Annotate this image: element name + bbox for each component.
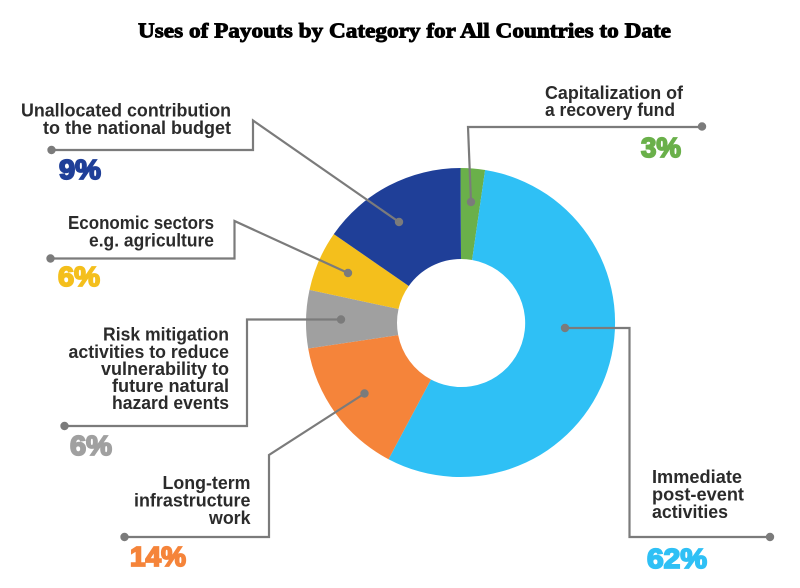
value: 9% [59,154,101,185]
label: post-event [652,484,744,504]
label [21,100,231,138]
leader line [561,324,774,541]
callout: risk mitigation [60,315,345,461]
leader line [47,120,403,226]
leader line [60,315,345,430]
segment: long-term infrastructure work 14% [308,335,431,459]
value: 3% [641,132,681,163]
label: activities to reduce [68,341,229,362]
segment: capitalization of a recovery fund 3% [460,168,485,260]
label: Unallocated contribution [21,100,231,120]
label: infrastructure [134,490,250,510]
label [68,212,214,250]
callout: capitalization of a recovery fund [467,82,706,206]
callout: long-term infrastructure work [120,389,369,572]
leader line [46,221,352,277]
title: Uses of Payouts by Category for All Countries to Date [138,18,671,42]
segment: immediate post-event activities 62% [388,170,615,477]
label: Long-term [162,472,250,493]
callout: unallocated contribution [21,100,403,226]
callout: immediate post-event activities [561,324,774,574]
label: work [208,507,251,528]
label: e.g. agriculture [89,230,214,250]
label: hazard events [112,392,229,413]
value: 62% [647,543,707,574]
label [68,324,229,413]
label [545,82,684,120]
segment: unallocated contribution 9% [334,168,461,286]
label: Immediate [652,466,742,487]
leader line [467,122,706,206]
value: 6% [70,430,112,461]
label: Capitalization of [545,82,684,103]
donut chart [306,168,615,477]
value: 6% [58,261,100,292]
label: activities [652,501,728,522]
label: a recovery fund [545,99,675,120]
leader line [120,389,369,541]
label: vulnerability to [101,358,229,379]
value: 14% [130,541,186,572]
segment: economic sectors 6% [310,234,409,309]
label [134,472,251,528]
label [652,466,744,522]
label: future natural [112,375,229,396]
label: Risk mitigation [103,324,229,344]
segment: risk mitigation 6% [306,290,398,348]
label: to the national budget [43,117,231,138]
callout: economic sectors [46,212,352,292]
label: Economic sectors [68,212,214,233]
